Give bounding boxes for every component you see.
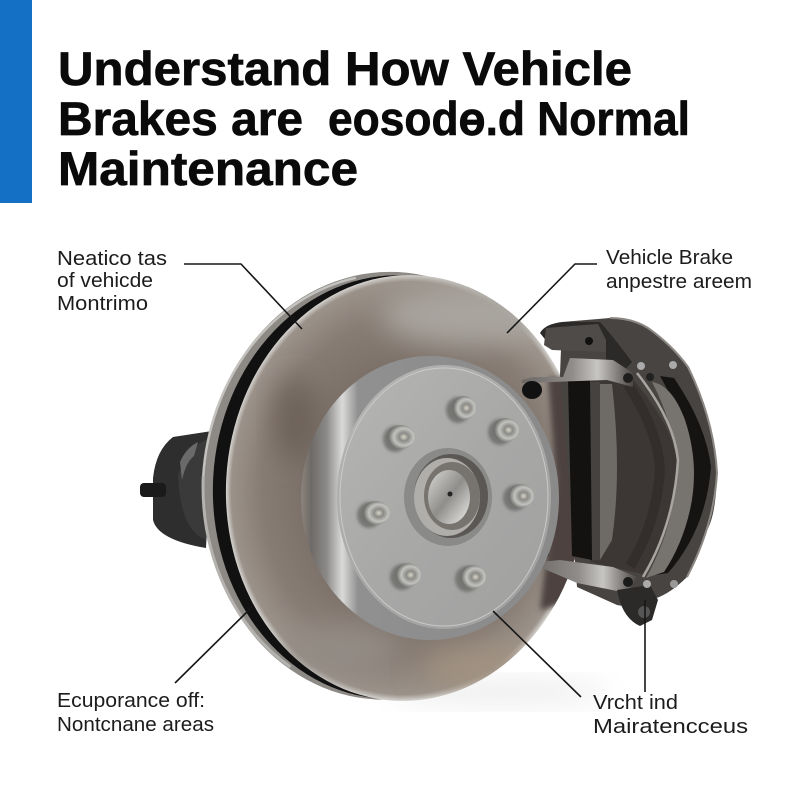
title: Maintenance <box>58 142 358 195</box>
hub hat section <box>301 356 559 640</box>
ground shadow <box>390 682 610 702</box>
caliper <box>522 318 717 626</box>
caliper back shell <box>560 318 717 606</box>
lower bracket <box>530 560 637 593</box>
callout arrow: caliper <box>644 600 646 692</box>
title: eosodө.d Normal <box>328 92 690 145</box>
title: Brakes are <box>58 92 303 145</box>
rear dust cap <box>140 431 212 548</box>
callout: bottom center: Mairatencceus <box>593 716 748 738</box>
caliper ring band <box>646 382 694 578</box>
callout: top right: Vehicle Brake <box>606 247 733 269</box>
callout: top left <box>57 248 302 329</box>
bright ring edge <box>637 373 678 577</box>
center bearing cap <box>404 448 492 546</box>
callout: bottom left: Nontcnane areas <box>57 714 214 736</box>
callout: top left: Neatico tas <box>57 248 167 270</box>
lug studs <box>357 396 534 592</box>
caliper dark window <box>655 376 711 575</box>
header accent bar <box>0 0 32 203</box>
upper bracket <box>540 322 632 375</box>
disc rear edge <box>192 262 588 709</box>
callout: bottom left <box>57 607 252 736</box>
callout: top left: Montrimo <box>57 293 148 315</box>
callout: bottom left: Ecuporance off: <box>57 690 205 712</box>
callout: top right <box>507 247 752 333</box>
disc friction face <box>226 275 575 701</box>
callout: top left: of vehicde <box>57 270 153 292</box>
callout: bottom center <box>493 611 748 738</box>
piston interior <box>590 378 677 574</box>
title: Understand How Vehicle <box>58 42 632 95</box>
title <box>58 42 690 195</box>
callout: top right: anpestre areem <box>606 271 752 293</box>
icon: brake assembly illustration <box>140 262 717 710</box>
brake pad <box>600 384 617 560</box>
callout: bottom center: Vrcht ind <box>593 692 678 714</box>
hub flange plate <box>337 365 551 629</box>
